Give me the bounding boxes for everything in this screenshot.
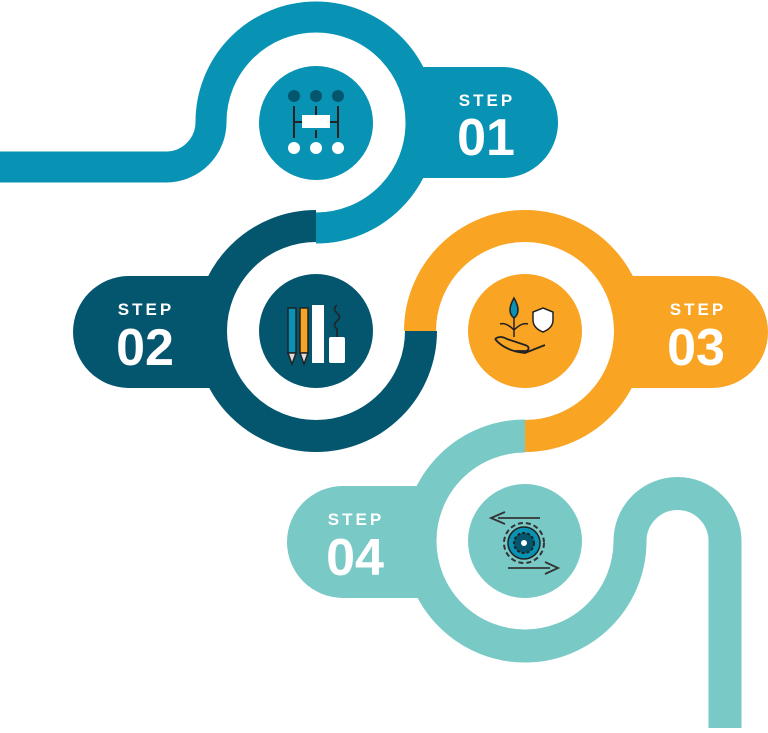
icon: step 3 plant in hand with shield xyxy=(468,274,582,388)
path: step 1 ring xyxy=(0,17,421,228)
pill: step 2 label xyxy=(73,276,243,388)
text: step 2 label: STEP xyxy=(118,300,174,319)
pill: step 1 label xyxy=(400,67,558,178)
text: step 2 label: 02 xyxy=(116,319,174,377)
text: step 3 label: 03 xyxy=(667,319,725,377)
path: step 2 ring xyxy=(211,226,421,436)
pill: step 3 label xyxy=(600,276,768,388)
path: step 4 ring xyxy=(420,436,725,728)
text: step 4 label: 04 xyxy=(326,529,384,587)
path: step 3 ring xyxy=(420,226,630,436)
text: step 1 label: STEP xyxy=(459,91,515,110)
icon: step 4 gear with cycle arrows xyxy=(468,484,582,598)
pill: step 4 label xyxy=(287,486,457,598)
icon: step 2 design tools xyxy=(259,274,373,388)
text: step 4 label: STEP xyxy=(328,510,384,529)
icon: step 1 flow diagram xyxy=(259,66,373,180)
text: step 1 label: 01 xyxy=(457,109,515,167)
text: step 3 label: STEP xyxy=(670,300,726,319)
